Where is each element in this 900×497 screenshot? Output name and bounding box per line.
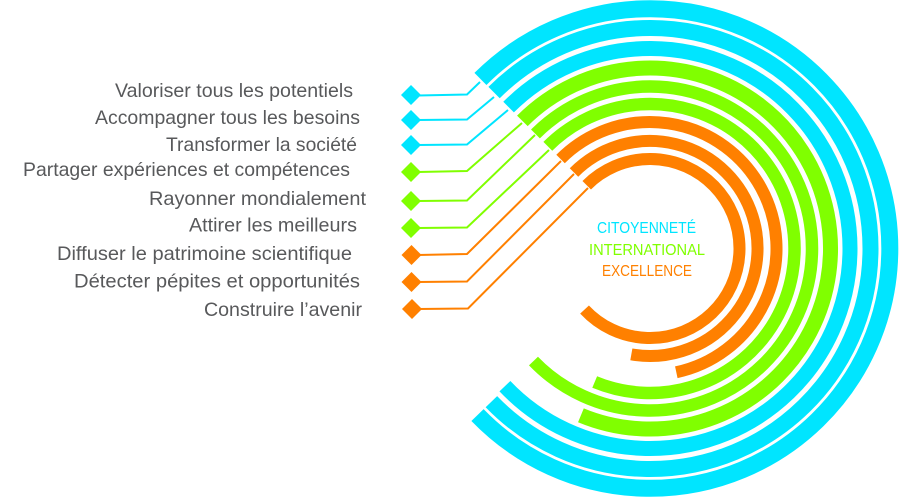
connector: green 3 — [418, 150, 549, 228]
arc: cyan 1 — [478, 9, 890, 488]
icon: orange diamond 3 — [402, 299, 422, 319]
label 7: Diffuser le patrimoine scientifique — [57, 243, 352, 265]
label 5: Rayonner mondialement — [149, 188, 367, 210]
list of labels — [23, 80, 367, 321]
center word: excellence: EXCELLENCE — [602, 263, 692, 280]
arc: orange 3 — [585, 159, 739, 338]
arc: green 2 — [533, 87, 812, 411]
label 2: Accompagner tous les besoins — [95, 107, 360, 129]
arc: cyan 3 — [505, 49, 850, 449]
label 9: Construire l’avenir — [204, 299, 362, 321]
label 6: Attirer les meilleurs — [189, 214, 357, 236]
connector: green 1 — [418, 123, 522, 172]
label 4: Partager expériences et compétences — [23, 159, 350, 181]
connector: cyan 3 — [418, 110, 508, 145]
concentric arcs — [478, 9, 890, 488]
icon: cyan diamond 1 — [401, 85, 421, 105]
connector: orange 1 — [418, 161, 561, 255]
icon: orange diamond 1 — [402, 245, 422, 265]
icon: green diamond 1 — [401, 162, 421, 182]
arc: cyan 2 — [491, 28, 870, 469]
center word: citoyenneté: CITOYENNETÉ — [597, 218, 696, 237]
connector: cyan 2 — [418, 97, 494, 120]
arc: orange 2 — [574, 141, 758, 356]
center title — [589, 218, 705, 280]
center word: international: INTERNATIONAL — [589, 242, 705, 259]
connector: orange 3 — [418, 188, 588, 309]
icon: green diamond 2 — [401, 191, 421, 211]
arc: orange 1 — [561, 122, 777, 372]
icon: cyan diamond 3 — [401, 135, 421, 155]
arc: green 1 — [522, 68, 831, 429]
icon: green diamond 3 — [401, 218, 421, 238]
label 3: Transformer la société — [166, 134, 357, 156]
connector: green 2 — [418, 135, 535, 201]
arc: green 3 — [548, 104, 794, 393]
label 8: Détecter pépites et opportunités — [74, 270, 360, 292]
icon: orange diamond 2 — [402, 272, 422, 292]
diamond markers — [401, 85, 422, 319]
connector: cyan 1 — [418, 82, 480, 96]
connector lines — [418, 82, 588, 309]
icon: cyan diamond 2 — [401, 110, 421, 130]
label 1: Valoriser tous les potentiels — [115, 80, 353, 102]
connector: orange 2 — [418, 174, 574, 282]
